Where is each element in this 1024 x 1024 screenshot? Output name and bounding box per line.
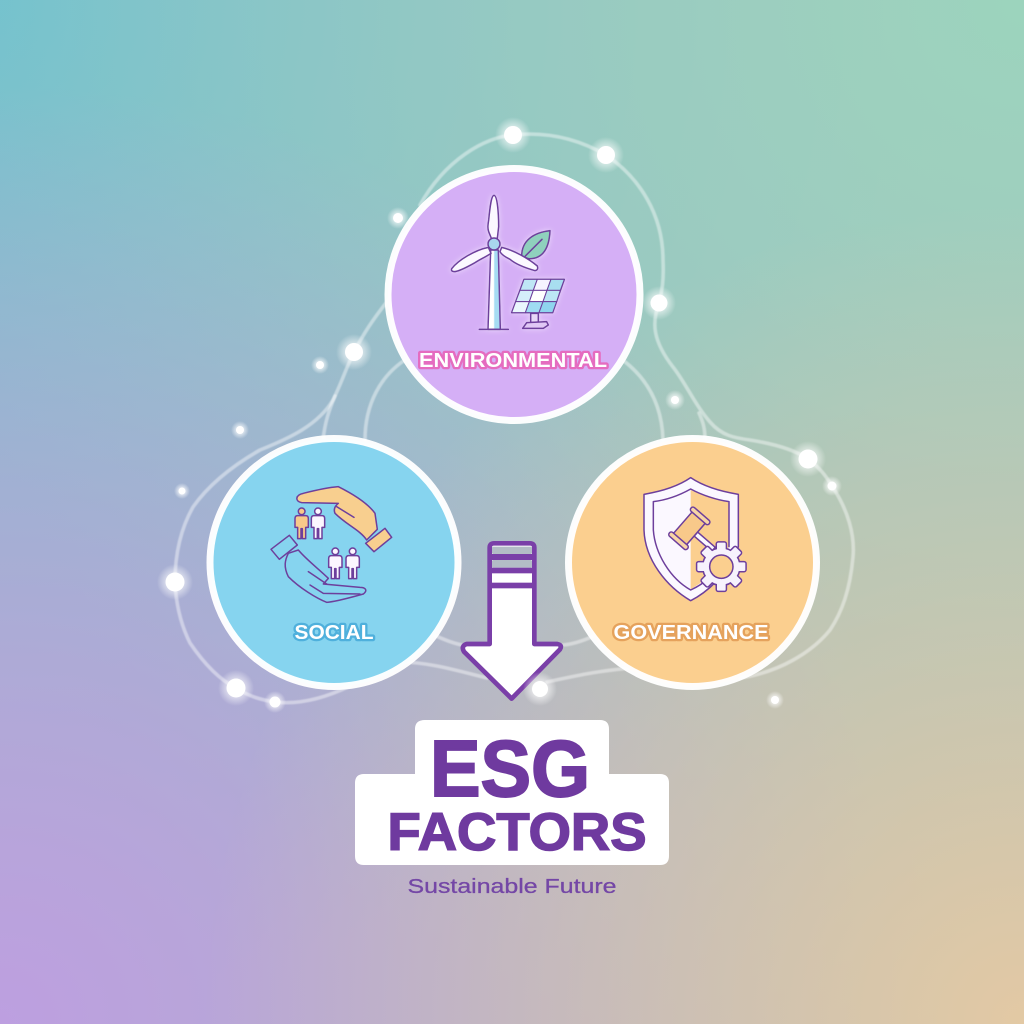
icon: gavel [668, 506, 726, 564]
circle: environmental [388, 168, 640, 420]
icon: shield [644, 478, 738, 601]
icon: lower hand [271, 535, 366, 602]
label: environmental: ENVIRONMENTAL [419, 349, 607, 372]
icon: shield, gavel and gear [644, 478, 745, 601]
title plate [355, 720, 669, 865]
arrow pointing down [463, 543, 561, 699]
subtitle: Sustainable Future [408, 875, 616, 898]
circle: governance [568, 438, 816, 686]
panel: environmental [388, 168, 640, 420]
glowing network nodes [157, 117, 842, 713]
panel: social [210, 438, 458, 686]
icon: turbine [451, 195, 538, 329]
network connecting lines [175, 134, 853, 703]
icon: hands protecting people [271, 487, 392, 602]
icon: solar panel [512, 279, 564, 328]
panel: governance [568, 438, 816, 686]
icon: wind turbine, leaf and solar panel [451, 195, 564, 329]
icon: gear [697, 543, 745, 591]
title: FACTORS: FACTORS [388, 803, 646, 862]
label: social: SOCIAL [294, 621, 374, 644]
title: ESG: ESG [430, 724, 590, 813]
circle: social [210, 438, 458, 686]
icon: people [295, 508, 359, 579]
icon: upper hand [297, 487, 392, 552]
icon: leaf [522, 231, 550, 259]
label: governance: GOVERNANCE [614, 621, 768, 644]
title block [355, 720, 669, 898]
